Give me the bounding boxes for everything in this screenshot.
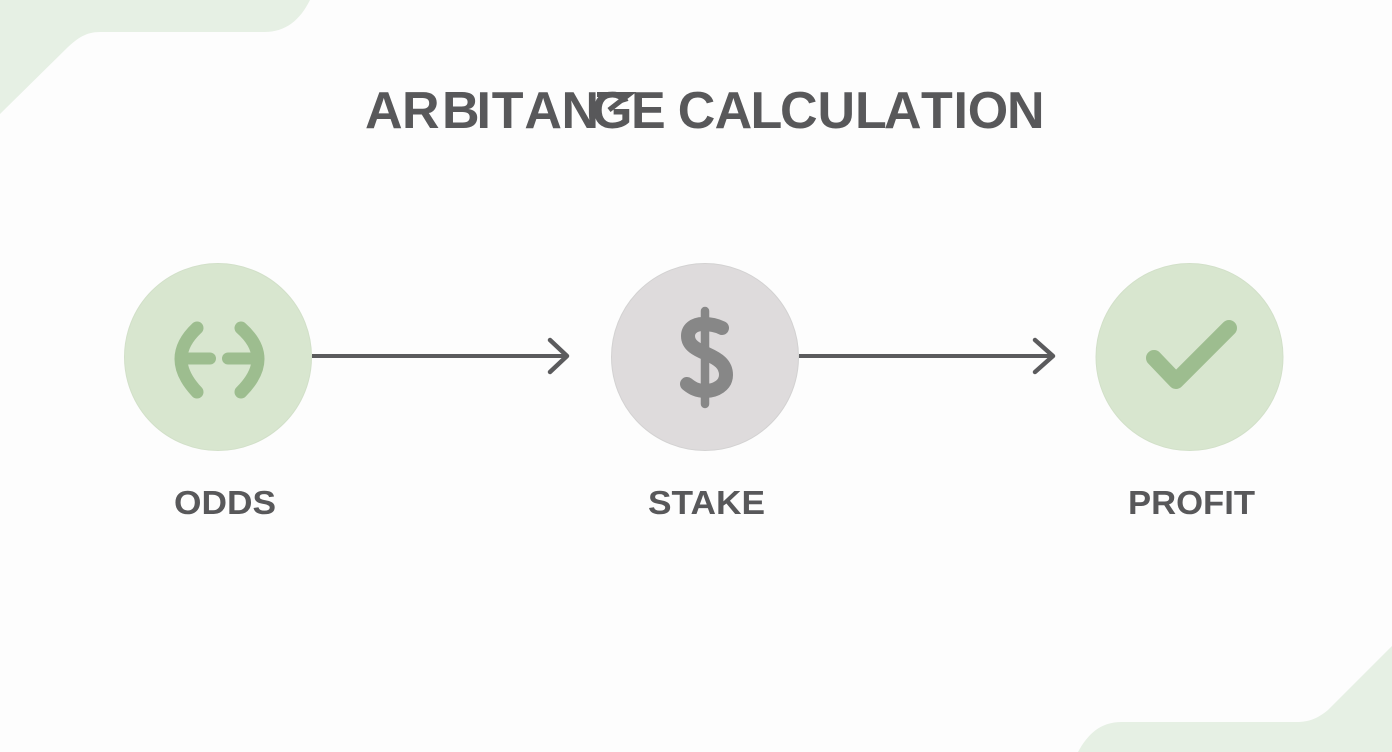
circle: odds (124, 264, 312, 450)
label: odds: ODDS (174, 484, 276, 521)
circle: profit (1096, 264, 1283, 450)
decorative corner: top left (0, 0, 310, 114)
title: ARBITANGE CALCULATION (365, 82, 1045, 140)
step: stake (612, 264, 798, 521)
icon: dollar sign (687, 311, 726, 404)
icon: check mark (1154, 328, 1229, 381)
label: profit: PROFIT (1128, 484, 1255, 521)
circle: stake (612, 264, 798, 450)
arrow: stake to profit (799, 340, 1053, 372)
step: odds (124, 264, 312, 521)
step: profit (1096, 264, 1283, 521)
icon: lightning stroke over title letter (597, 94, 629, 110)
label: stake: STAKE (648, 484, 765, 521)
decorative corner: bottom right (1078, 646, 1392, 752)
arrow: odds to stake (312, 340, 567, 372)
icon: odds arrows (181, 328, 258, 392)
